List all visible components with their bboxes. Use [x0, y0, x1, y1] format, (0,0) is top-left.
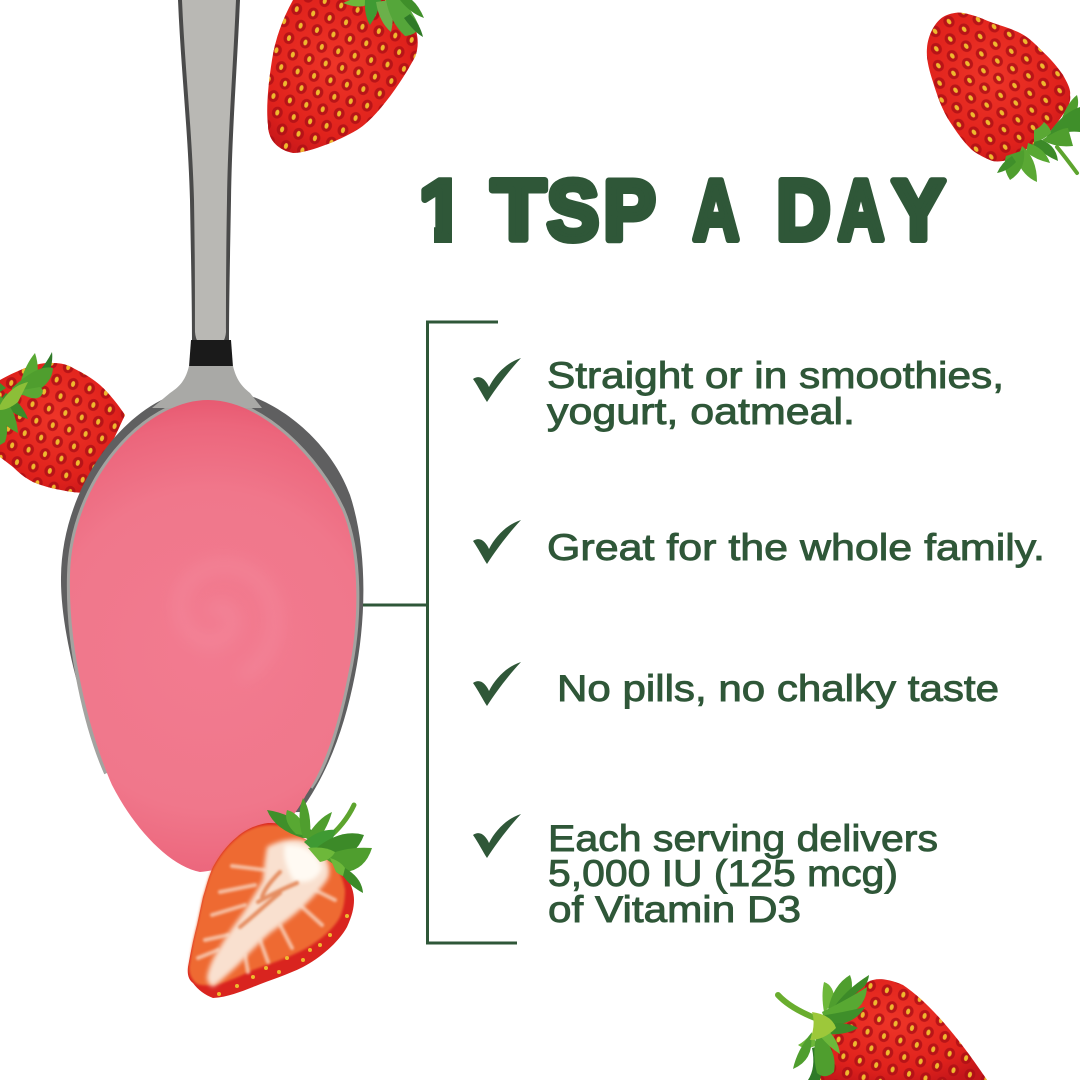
text: family: Great for the whole family. [547, 527, 1045, 568]
calyx [343, 0, 424, 37]
title: T [492, 164, 546, 258]
list item 3 [473, 662, 999, 709]
title: Y [892, 164, 945, 258]
title: S [547, 164, 599, 258]
text: serving suggestions: Straight or in smoothies, [547, 355, 1004, 396]
list item 4: 5,000 IU (125 mcg) [548, 853, 898, 894]
calyx and stem [778, 975, 869, 1080]
rim seeds [217, 914, 349, 996]
bracket connecting spoon to list [363, 322, 517, 943]
spoon bowl: pink cream [70, 400, 356, 872]
list item 2 [473, 520, 1045, 568]
text: no pills: No pills, no chalky taste [557, 668, 999, 709]
strawberry: top centre [267, 0, 424, 153]
spoon handle [178, 0, 240, 347]
list item 4: of Vitamin D3 [548, 889, 801, 930]
title: A [838, 164, 884, 258]
strawberry: cut half [188, 798, 372, 998]
spoon bowl rim [61, 388, 363, 817]
icon: check mark [473, 520, 521, 564]
strawberry: bottom right [778, 975, 987, 1080]
icon: check mark [473, 814, 521, 858]
list item 4 [473, 814, 938, 930]
strawberry: left of spoon [0, 352, 125, 493]
list item 1 [473, 355, 1004, 432]
icon: check mark [473, 662, 521, 706]
title: A [693, 164, 739, 258]
white rays [198, 866, 335, 972]
stem and leaves [267, 798, 372, 893]
calyx and stem [997, 95, 1080, 182]
spoon neck plate [152, 366, 262, 408]
title [421, 176, 947, 244]
calyx [0, 352, 53, 445]
title: P [604, 164, 656, 258]
core seeds [240, 872, 297, 927]
icon: check mark [473, 358, 521, 402]
title: 1 [419, 164, 466, 258]
spoon [61, 0, 363, 872]
white core [207, 839, 329, 987]
list item 1: yogurt, oatmeal. [547, 391, 855, 432]
cream swirl [180, 565, 275, 675]
text: vitamin D3 dose: Each serving delivers [548, 818, 938, 859]
strawberry: top right [927, 13, 1080, 182]
spoon neck [189, 340, 233, 367]
title: D [776, 164, 830, 258]
